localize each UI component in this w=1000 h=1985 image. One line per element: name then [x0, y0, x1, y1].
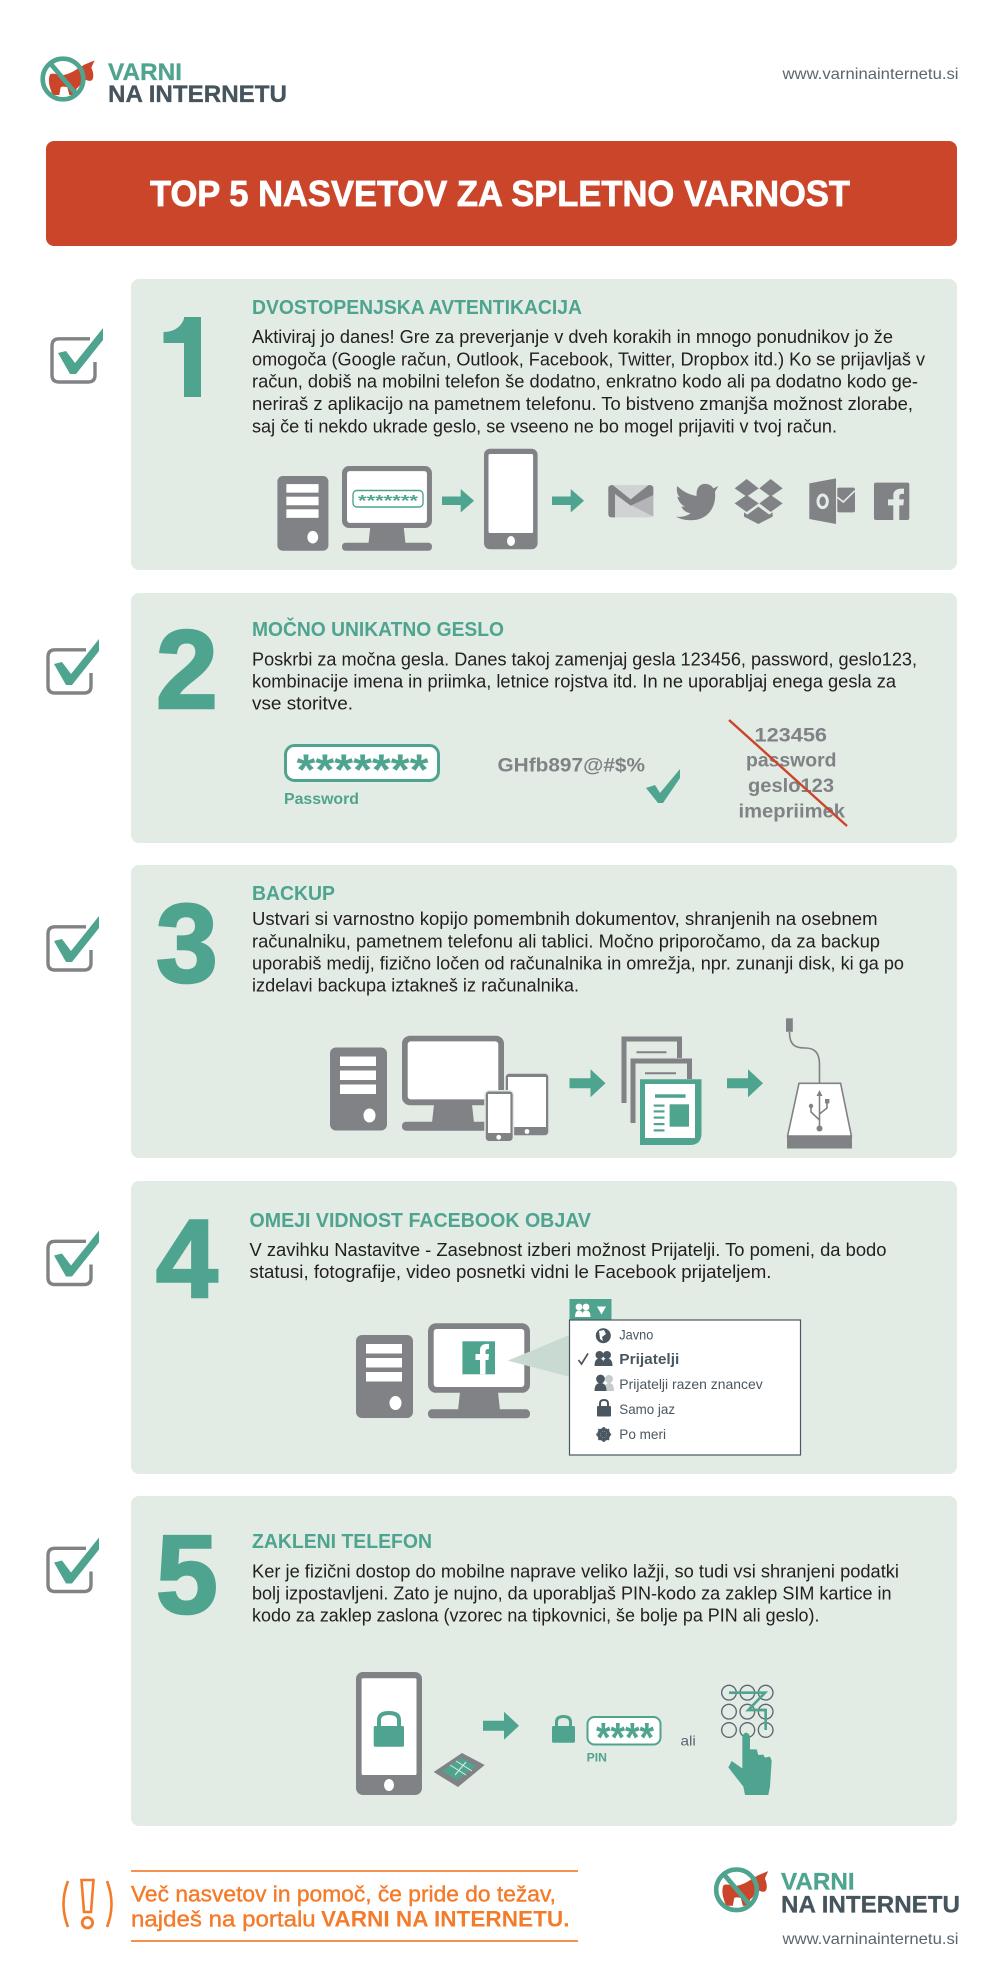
body text: Poskrbi za močna gesla. Danes takoj zamenjaj gesla 123456, password, geslo123, [252, 649, 917, 670]
logo: header: NA INTERNETU [108, 81, 287, 108]
body text [250, 1239, 886, 1282]
number 3: 3 [156, 882, 218, 1006]
facebook privacy menu: Po meri [619, 1426, 666, 1442]
icon: dropbox [735, 479, 783, 524]
icon: monitor [402, 1036, 504, 1131]
title banner [46, 141, 957, 246]
icon: documents [624, 1039, 702, 1145]
facebook privacy menu [570, 1299, 800, 1455]
password field [284, 746, 438, 808]
arrow [570, 1069, 606, 1097]
icon: computer tower [277, 476, 328, 551]
weak passwords crossed out [729, 720, 847, 826]
logo: footer: NA INTERNETU [781, 1891, 960, 1918]
facebook privacy menu: Prijatelji [619, 1352, 679, 1368]
icon: friends [594, 1351, 612, 1366]
body text: Ker je fizični dostop do mobilne naprave veliko lažji, so tudi vsi shranjeni podatki [252, 1560, 899, 1581]
icon: locked phone [356, 1672, 422, 1795]
body text [252, 908, 904, 996]
number 2: 2 [156, 608, 218, 732]
icon: checkbox 2 [48, 639, 99, 693]
heading: ZAKLENI TELEFON [252, 1530, 432, 1553]
body text: uporabiš medij, fizično ločen od računalnika in omrežja, npr. zunanji disk, ki ga po [252, 952, 904, 973]
body text: vse storitve. [252, 692, 353, 713]
heading: DVOSTOPENJSKA AVTENTIKACIJA [252, 296, 582, 319]
number 1: 1 [159, 296, 221, 421]
body text: račun, dobiš na mobilni telefon še dodatno, enkratno kodo ali pa dodatno kodo ge- [252, 371, 918, 392]
website url: header: www.varninainternetu.si [781, 66, 958, 83]
body text: izdelavi backupa iztakneš iz računalnika. [252, 975, 579, 996]
body text: kombinacije imena in priimka, letnice rojstva itd. In ne uporabljaj enega gesla za [252, 671, 897, 692]
icon: gear [596, 1427, 611, 1442]
logo: header: VARNI [108, 59, 182, 86]
body text: omogoča (Google račun, Outlook, Facebook, Twitter, Dropbox itd.) Ko se prijavljaš v [252, 348, 926, 370]
icon: checkbox 1 [52, 328, 103, 382]
heading: MOČNO UNIKATNO GESLO [252, 617, 504, 641]
callout: more tips: Več nasvetov in pomoč, če pride do težav, [131, 1882, 556, 1907]
strong password example [498, 755, 680, 803]
logo: header [43, 59, 287, 108]
facebook privacy menu: Prijatelji razen znancev [619, 1376, 763, 1392]
number 1 [164, 317, 201, 397]
website url: footer: www.varninainternetu.si [781, 1931, 958, 1948]
body text: statusi, fotografije, video posnetki vidni le Facebook prijateljem. [250, 1261, 772, 1282]
icon: outlook [809, 478, 855, 524]
title banner: TOP 5 NASVETOV ZA SPLETNO VARNOST [150, 173, 850, 214]
panel: tip 1 two-factor authentication [131, 279, 957, 570]
logo: footer [716, 1868, 960, 1918]
arrow [483, 1712, 519, 1740]
icon: lock [597, 1400, 611, 1416]
body text: Ustvari si varnostno kopijo pomembnih dokumentov, shranjenih na osebnem [252, 908, 878, 929]
arrow [552, 489, 584, 513]
callout: more tips [131, 1871, 578, 1941]
body text: bolj izpostavljeni. Zato je nujno, da uporabljaš PIN-kodo za zaklep SIM kartice in [252, 1582, 892, 1603]
password field: Password [284, 791, 359, 808]
body text: V zavihku Nastavitve - Zasebnost izberi možnost Prijatelji. To pomeni, da bodo [250, 1239, 886, 1260]
icon: check [578, 1354, 588, 1364]
callout: more tips: najdeš na portalu [131, 1907, 316, 1932]
arrow [727, 1069, 763, 1097]
body text: saj če ti nekdo ukrade geslo, se vseeno ne bo mogel prijaviti v tvoj račun. [252, 415, 837, 436]
pin field: **** [596, 1714, 655, 1761]
number 5: 5 [156, 1513, 218, 1637]
icon: phone [485, 1091, 513, 1142]
heading: BACKUP [252, 882, 335, 905]
body text: neriraš z aplikacijo na pametnem telefonu. To bistveno zmanjša možnost zlorabe, [252, 393, 913, 414]
icon: facebook [874, 483, 909, 520]
pin field: PIN [587, 1751, 607, 1765]
panel: tip 3 backup [131, 865, 957, 1158]
icon: sim card [434, 1753, 485, 1787]
icon: computer tower [330, 1048, 387, 1130]
logo: footer: VARNI [781, 1868, 855, 1895]
body text [252, 326, 926, 436]
panel: tip 2 strong unique password [131, 593, 957, 843]
password field: ******* [296, 746, 429, 794]
icon: friends except acquaintances [594, 1375, 614, 1391]
body text: Aktiviraj jo danes! Gre za preverjanje v dveh korakih in mnogo ponudnikov jo že [252, 326, 893, 347]
icon: checkbox 5 [48, 1538, 99, 1592]
heading: OMEJI VIDNOST FACEBOOK OBJAV [250, 1209, 591, 1232]
icon: checkbox 3 [48, 916, 99, 970]
weak passwords crossed out: 123456 [754, 724, 827, 746]
icon: monitor with facebook [428, 1323, 530, 1418]
arrow [442, 489, 474, 513]
icon: monitor with password [342, 466, 432, 551]
icon: unlock pattern and hand [722, 1685, 773, 1795]
facebook privacy menu: Samo jaz [619, 1401, 675, 1417]
callout: more tips: VARNI NA INTERNETU. [321, 1907, 570, 1932]
icon: small lock [552, 1716, 575, 1743]
panel: tip 4 limit facebook visibility [131, 1181, 957, 1474]
icon: computer tower [356, 1335, 413, 1418]
icon: warning exclamation [64, 1880, 112, 1928]
strong password example: GHfb897@#$% [498, 755, 645, 777]
icon: globe [596, 1328, 611, 1343]
panel: tip 5 lock the phone [131, 1496, 957, 1826]
facebook privacy menu: Javno [619, 1326, 653, 1342]
icon: checkbox 4 [48, 1230, 99, 1284]
callout pointer [508, 1335, 570, 1377]
icon: tablet [505, 1073, 549, 1136]
weak passwords crossed out: password [746, 750, 836, 772]
label: ali: ali [680, 1733, 696, 1749]
icon: gmail [608, 485, 653, 517]
body text: računalniku, pametnem telefonu ali tablici. Močno priporočamo, da za backup [252, 930, 880, 951]
body text [252, 1560, 899, 1626]
icon: external usb disk [786, 1018, 852, 1148]
body text [252, 649, 917, 713]
icon: monitor with password: ******* [358, 493, 419, 510]
icon: twitter [676, 484, 718, 520]
weak passwords crossed out: geslo123 [748, 775, 834, 797]
weak passwords crossed out: imepriimek [738, 800, 845, 822]
body text: kodo za zaklep zaslona (vzorec na tipkovnici, še bolje pa PIN ali geslo). [252, 1605, 820, 1626]
icon: phone [484, 449, 538, 549]
number 4: 4 [156, 1197, 218, 1321]
